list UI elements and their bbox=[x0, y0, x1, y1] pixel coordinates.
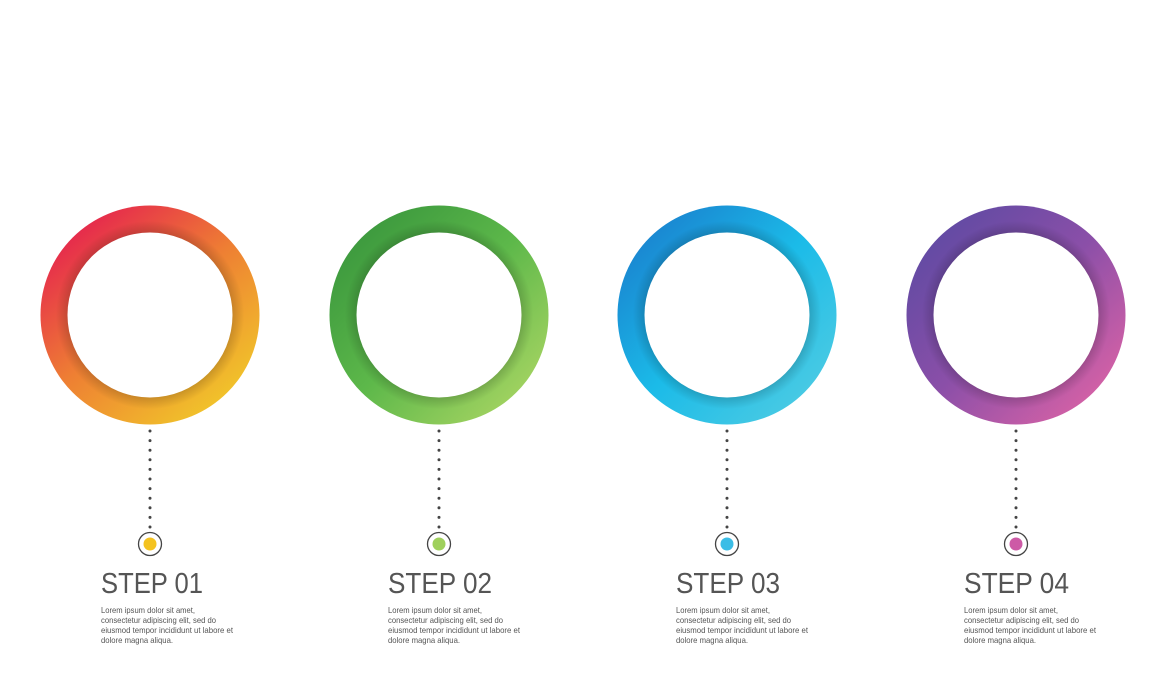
ring: step 04 bbox=[906, 206, 1126, 424]
step 02 bbox=[330, 206, 548, 645]
dotted connector: step 02 bbox=[438, 431, 440, 528]
heading: step 04: STEP 04 bbox=[964, 568, 1069, 600]
ring: step 01 bbox=[40, 206, 260, 424]
step 03 bbox=[618, 206, 836, 645]
body text: step 01: Lorem ipsum dolor sit amet, bbox=[101, 605, 195, 615]
step 04 bbox=[906, 206, 1126, 645]
body text: step 02: Lorem ipsum dolor sit amet, bbox=[388, 605, 482, 615]
body text: step 02: consectetur adipiscing elit, sed do bbox=[388, 615, 503, 625]
dotted connector: step 03 bbox=[726, 431, 728, 528]
body text: step 02: eiusmod tempor incididunt ut labore et bbox=[388, 625, 521, 635]
step 01 bbox=[40, 206, 260, 645]
marker: step 02 bbox=[428, 532, 450, 556]
heading: step 01: STEP 01 bbox=[101, 568, 203, 600]
heading: step 02: STEP 02 bbox=[388, 568, 492, 600]
body text: step 01: consectetur adipiscing elit, sed do bbox=[101, 615, 216, 625]
body text: step 04: Lorem ipsum dolor sit amet, bbox=[964, 605, 1058, 615]
body text: step 01: dolore magna aliqua. bbox=[101, 635, 173, 645]
body text: step 01: eiusmod tempor incididunt ut labore et bbox=[101, 625, 234, 635]
body text: step 04: dolore magna aliqua. bbox=[964, 635, 1036, 645]
marker: step 03 bbox=[716, 532, 738, 556]
marker: step 01 bbox=[138, 532, 162, 556]
body text: step 03: Lorem ipsum dolor sit amet, bbox=[676, 605, 770, 615]
body text: step 03: eiusmod tempor incididunt ut labore et bbox=[676, 625, 809, 635]
body text: step 03: consectetur adipiscing elit, sed do bbox=[676, 615, 791, 625]
dotted connector: step 04 bbox=[1014, 431, 1018, 528]
heading: step 03: STEP 03 bbox=[676, 568, 780, 600]
body text: step 03: dolore magna aliqua. bbox=[676, 635, 748, 645]
body text: step 02: dolore magna aliqua. bbox=[388, 635, 460, 645]
marker: step 04 bbox=[1004, 532, 1028, 556]
body text: step 04: consectetur adipiscing elit, sed do bbox=[964, 615, 1079, 625]
body text: step 04: eiusmod tempor incididunt ut labore et bbox=[964, 625, 1097, 635]
ring: step 02 bbox=[330, 206, 548, 424]
dotted connector: step 01 bbox=[148, 431, 152, 528]
ring: step 03 bbox=[618, 206, 836, 424]
